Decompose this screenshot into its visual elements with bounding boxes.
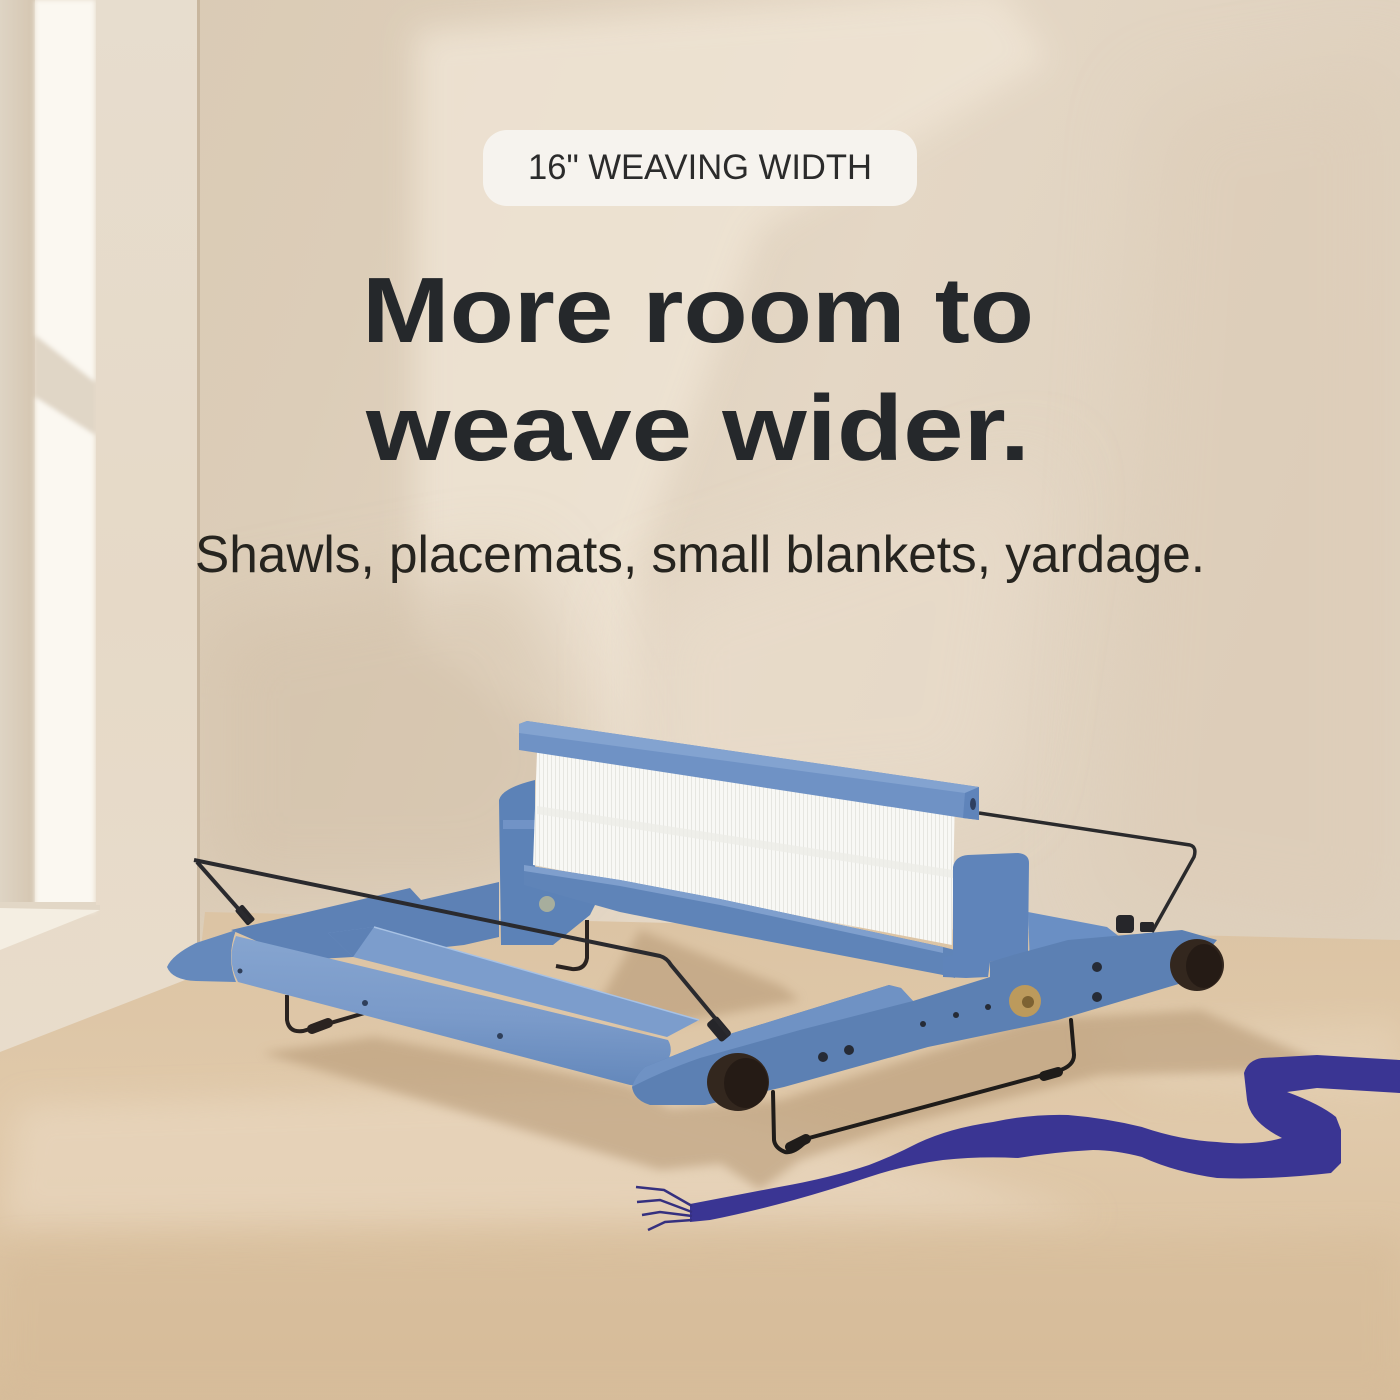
back legs (287, 920, 587, 1031)
side rail fittings (818, 962, 1102, 1062)
front legs (773, 1020, 1074, 1152)
centre beam (328, 927, 699, 1037)
bail clamp fittings (235, 904, 1154, 1043)
badge (483, 130, 917, 206)
wall background (0, 0, 1400, 1000)
top bar (519, 721, 979, 820)
right reed upright (943, 853, 1029, 978)
dark knobs (707, 939, 1224, 1111)
far right rail end (1028, 912, 1130, 965)
right side rail (632, 930, 1217, 1105)
subtitle: Shawls, placemats, small blankets, yardage. (195, 526, 1205, 584)
left side rail tip (167, 930, 236, 982)
white heddle reed (533, 752, 955, 945)
ribbon (636, 1055, 1400, 1230)
back wire bail (979, 813, 1195, 932)
brass knob (1009, 985, 1041, 1017)
badge: 16" WEAVING WIDTH (528, 148, 872, 187)
table top (0, 912, 1400, 1400)
title: More room to (362, 258, 1034, 362)
title: weave wider. (365, 376, 1030, 480)
left reed upright (499, 780, 600, 945)
shadows on table (262, 930, 1340, 1190)
far side rail and cross bar (231, 882, 499, 960)
title (362, 258, 1034, 480)
front roller (231, 936, 671, 1086)
loom (167, 721, 1224, 1152)
lower reed bar (524, 865, 955, 978)
front wire bail (194, 860, 729, 1035)
window and frame (0, 0, 200, 1060)
